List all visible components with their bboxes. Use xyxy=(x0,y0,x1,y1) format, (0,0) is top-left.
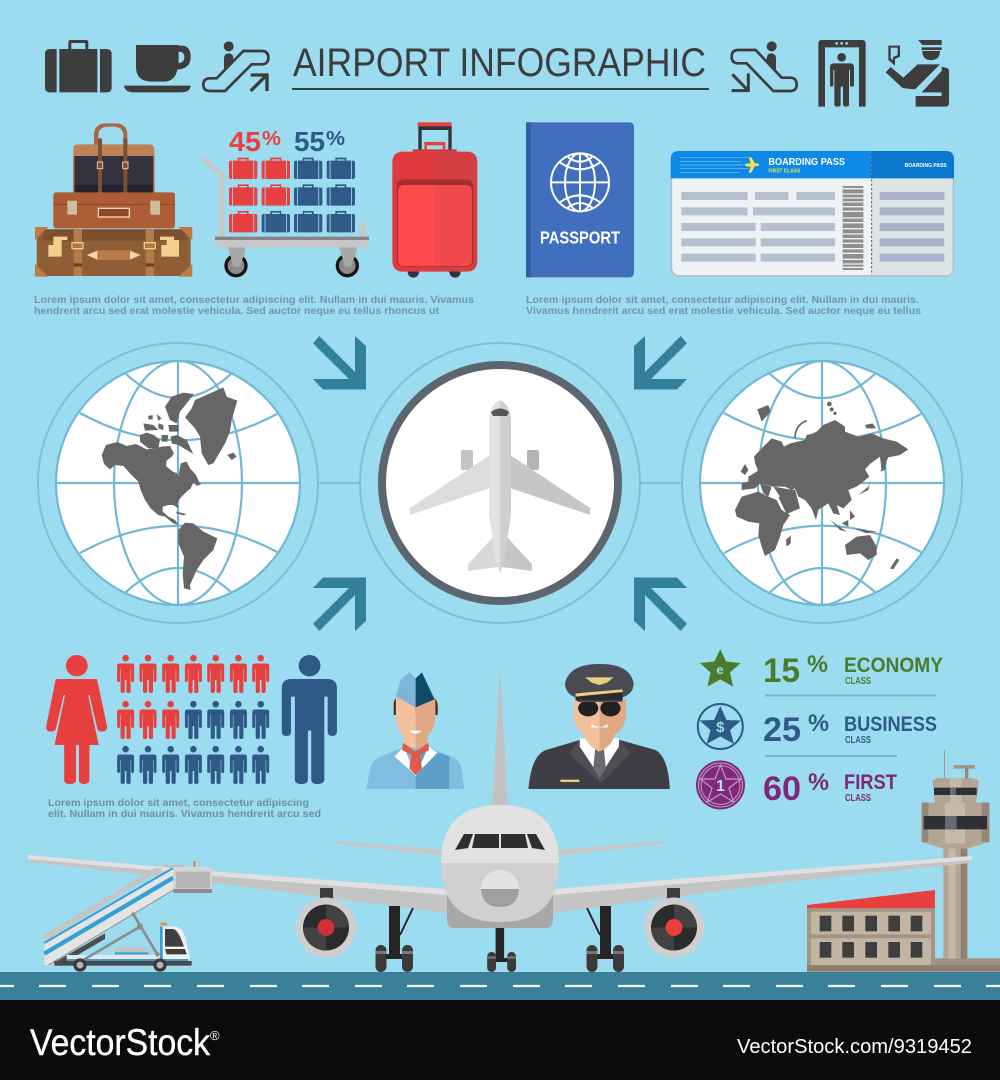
text block: documents: Lorem ipsum dolor sit amet, consectetur adipiscing elit. Nullam in dui mauris. xyxy=(526,294,919,306)
panel: documents xyxy=(526,122,954,277)
horizontal stabilizers xyxy=(336,841,664,856)
divider xyxy=(765,696,936,756)
arrow: bottom left xyxy=(313,578,366,631)
text block: luggage xyxy=(34,294,474,317)
stewardess xyxy=(366,672,464,789)
45 percent: % xyxy=(262,128,281,150)
boarding pass xyxy=(671,151,954,276)
control tower and terminal xyxy=(807,750,1000,972)
airplane top view xyxy=(410,400,590,574)
globe: airplane xyxy=(360,343,640,623)
text block: documents: Vivamus hendrerit arcu sed erat molestie vehicula. Sed auctor neque eu tellus xyxy=(526,305,921,317)
title: AIRPORT INFOGRAPHIC xyxy=(293,41,706,85)
connector lines xyxy=(318,482,682,484)
45 percent: 45 xyxy=(229,126,261,157)
icon: escalator up xyxy=(203,41,268,91)
icon: passport officer xyxy=(886,40,949,107)
icon: metal detector xyxy=(818,40,866,107)
map: Americas xyxy=(102,387,237,590)
55 percent: % xyxy=(326,128,345,150)
map: Eurasia, Africa, Australia xyxy=(735,402,908,569)
pictogram: man xyxy=(282,655,337,784)
first class row xyxy=(696,760,897,810)
business row xyxy=(698,704,937,749)
first class row: % xyxy=(808,769,829,796)
text block: passengers: Lorem ipsum dolor sit amet, consectetur adipiscing xyxy=(48,797,309,809)
pictogram: passenger share xyxy=(117,655,269,784)
boarding pass: FIRST CLASS xyxy=(768,169,801,175)
header icons left xyxy=(45,40,268,92)
pictogram: woman xyxy=(46,655,107,784)
footer watermark bar: VectorStock.com/9319452 xyxy=(737,1036,972,1058)
passport: PASSPORT xyxy=(540,227,620,247)
economy row: e xyxy=(716,662,724,677)
arrow: top left xyxy=(313,336,366,390)
panel: luggage xyxy=(35,122,477,278)
arrow: bottom right xyxy=(634,578,687,631)
first class row: FIRST xyxy=(844,771,897,794)
luggage trolley xyxy=(205,160,369,277)
airplane front view xyxy=(28,670,972,972)
55 percent xyxy=(294,126,345,157)
truck xyxy=(54,912,192,972)
header icons right xyxy=(732,40,949,107)
economy row: % xyxy=(807,651,828,678)
economy row: ECONOMY xyxy=(844,654,943,677)
business row: CLASS xyxy=(845,735,871,746)
engines xyxy=(296,888,704,958)
first class row: CLASS xyxy=(845,793,871,804)
pilot xyxy=(528,664,670,789)
business row: % xyxy=(808,710,829,737)
text block: luggage: hendrerit arcu sed erat molestie vehicula. Sed auctor neque eu tellus rhoncus ut xyxy=(34,305,439,317)
text block: documents xyxy=(526,294,921,317)
tower xyxy=(922,750,989,959)
suitcase stack xyxy=(35,123,192,277)
airstair truck xyxy=(44,861,212,972)
icon: escalator down xyxy=(732,41,797,91)
arrow: top right xyxy=(634,336,687,390)
globe: Eurasia xyxy=(682,343,962,623)
footer watermark bar xyxy=(0,1000,1000,1080)
title rule xyxy=(292,88,709,90)
business row: BUSINESS xyxy=(844,713,937,736)
runway xyxy=(0,972,1000,1000)
platform xyxy=(160,861,212,893)
55 percent: 55 xyxy=(294,126,325,157)
text block: luggage: Lorem ipsum dolor sit amet, consectetur adipiscing elit. Nullam in dui mauris. Vivamus xyxy=(34,294,474,306)
globe: Americas xyxy=(38,343,318,623)
first class row: 60 xyxy=(763,770,801,808)
icon: suitcase xyxy=(45,40,112,92)
terminal building xyxy=(807,890,1000,972)
economy row xyxy=(700,649,943,690)
landing gear xyxy=(376,906,624,972)
text block: passengers xyxy=(48,797,321,820)
class icons and stats xyxy=(696,649,943,810)
economy row: 15 xyxy=(763,652,800,690)
fuselage xyxy=(441,805,559,928)
wings xyxy=(28,855,972,913)
economy row: CLASS xyxy=(845,676,871,687)
red rolling suitcase xyxy=(392,122,477,278)
boarding pass: BOARDING PASS xyxy=(905,163,947,169)
business row: 25 xyxy=(763,711,801,749)
panel: passengers xyxy=(46,655,337,784)
first class row: 1 xyxy=(716,778,725,795)
footer watermark bar: ® xyxy=(210,1028,220,1043)
stairs xyxy=(44,867,175,965)
icon: coffee cup xyxy=(124,45,191,92)
boarding pass: BOARDING PASS xyxy=(768,157,845,168)
passport xyxy=(526,122,634,277)
luggage share icons xyxy=(229,158,355,232)
text block: passengers: elit. Nullam in dui mauris. Vivamus hendrerit arcu sed xyxy=(48,808,321,820)
45 percent xyxy=(229,126,281,157)
tail fin xyxy=(492,670,508,806)
business row: $ xyxy=(716,719,725,736)
footer watermark bar: VectorStock xyxy=(30,1022,210,1063)
